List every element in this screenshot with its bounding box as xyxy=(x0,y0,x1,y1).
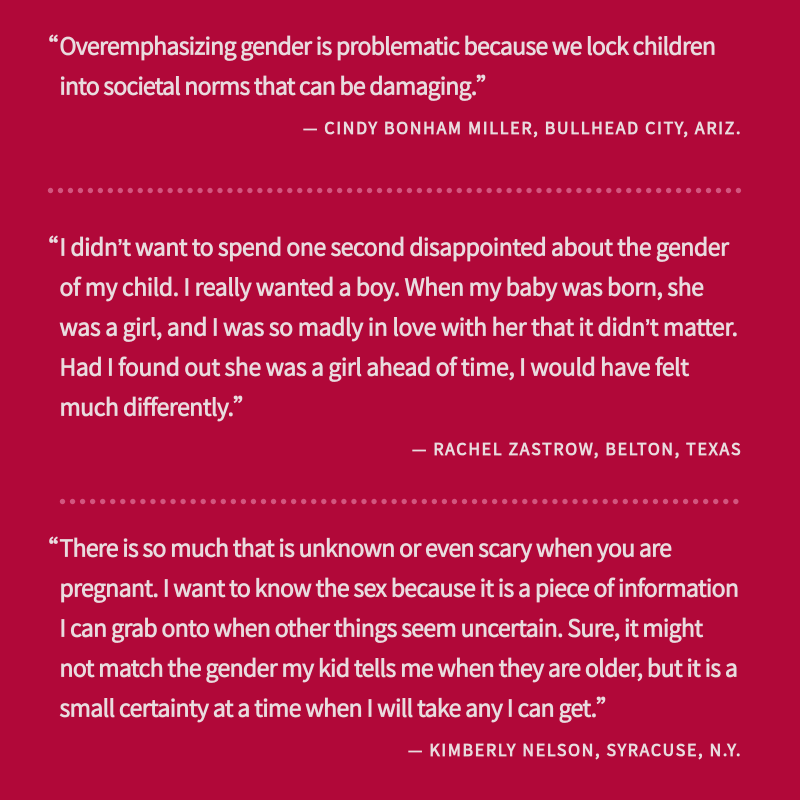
quote block: Kimberly Nelson: not match the gender my kid tells me when they are older, but it is a xyxy=(60,650,738,684)
quote block: Kimberly Nelson: pregnant. I want to know the sex because it is a piece of information xyxy=(60,570,739,604)
quote block: Kimberly Nelson: There is so much that is unknown or even scary when you are xyxy=(60,530,672,564)
quote block: Rachel Zastrow: was a girl, and I was so madly in love with her that it didn’t matter. xyxy=(60,308,738,342)
quote block: Cindy Bonham Miller: Overemphasizing gender is problematic because we lock children xyxy=(60,28,716,62)
quote block: Kimberly Nelson xyxy=(46,530,740,761)
quote block: Kimberly Nelson: I can grab onto when other things seem uncertain. Sure, it might xyxy=(60,610,703,644)
quote block: Kimberly Nelson: small certainty at a time when I will take any I can get.” xyxy=(60,690,608,724)
quote block: Cindy Bonham Miller xyxy=(46,28,740,139)
quote block: Cindy Bonham Miller: “ xyxy=(46,28,58,62)
quote block: Rachel Zastrow: much differently.” xyxy=(60,388,245,422)
quote block: Kimberly Nelson: “ xyxy=(46,530,58,564)
quote block: Rachel Zastrow: — RACHEL ZASTROW, BELTON, TEXAS xyxy=(412,436,740,460)
quote block: Cindy Bonham Miller: — CINDY BONHAM MILLER, BULLHEAD CITY, ARIZ. xyxy=(303,115,740,139)
quote block: Rachel Zastrow: of my child. I really wanted a boy. When my baby was born, she xyxy=(60,268,704,302)
quote block: Rachel Zastrow: Had I found out she was a girl ahead of time, I would have felt xyxy=(60,348,689,382)
quote block: Cindy Bonham Miller: into societal norms that can be damaging.” xyxy=(60,68,488,102)
quote block: Rachel Zastrow: “ xyxy=(46,228,58,262)
quote block: Rachel Zastrow xyxy=(46,228,740,460)
quote block: Kimberly Nelson: — KIMBERLY NELSON, SYRACUSE, N.Y. xyxy=(408,737,740,761)
quote block: Rachel Zastrow: I didn’t want to spend one second disappointed about the gender xyxy=(60,228,729,262)
